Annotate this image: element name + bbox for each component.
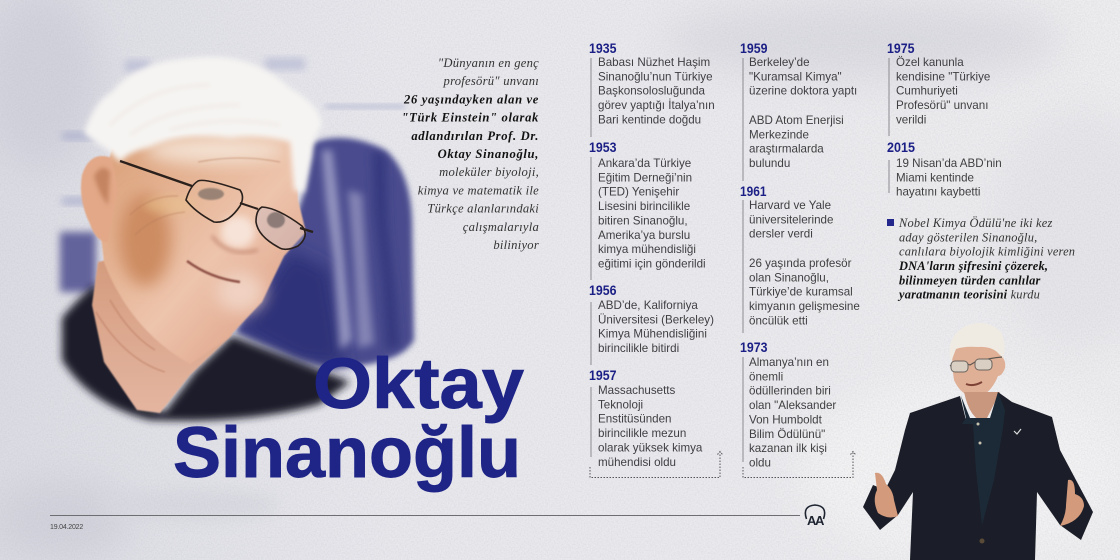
title <box>173 345 525 493</box>
entry 1973: Almanya’nın en <box>749 356 829 369</box>
timeline column 2 <box>740 41 860 469</box>
Nobel callout: yaratmanın teorisini <box>897 288 1008 302</box>
entry 1961: öncülük etti <box>749 314 808 327</box>
entry 1953: Amerika’ya burslu <box>598 229 690 242</box>
entry 1961: olan Sinanoğlu, <box>749 271 829 284</box>
entry 1959: üzerine doktora yaptı <box>749 85 857 98</box>
entry 1957 <box>589 368 703 469</box>
entry 1961: üniversitelerinde <box>749 213 833 226</box>
entry 1961: dersler verdi <box>749 228 813 241</box>
neck <box>92 250 232 413</box>
logo: AA: AA <box>807 513 825 528</box>
entry 1953: (TED) Yenişehir <box>598 186 679 199</box>
jacket <box>863 392 1093 560</box>
entry 1973: 1973 <box>740 340 768 355</box>
entry 1975: verildi <box>896 113 926 126</box>
intro text: biliniyor <box>493 238 539 252</box>
entry 1961: 26 yaşında profesör <box>749 257 852 270</box>
ear <box>81 156 118 242</box>
nose <box>212 236 258 252</box>
entry 1935: görev yaptığı İtalya’nın <box>598 99 715 112</box>
footer line <box>50 515 800 516</box>
entry 1959 <box>740 41 857 181</box>
entry 1935: 1935 <box>589 41 617 56</box>
intro text: Türkçe alanlarındaki <box>427 202 539 216</box>
Nobel callout: canlılara biyolojik kimliğini veren <box>899 245 1075 259</box>
entry 1961 <box>740 184 860 333</box>
entry 1959: araştırmalarda <box>749 143 824 156</box>
entry 1953: kimya mühendisliği <box>598 243 696 256</box>
title: Oktay <box>313 345 525 424</box>
entry 1975: kendisine "Türkiye <box>896 70 990 83</box>
intro text: moleküler biyoloji, <box>439 165 539 179</box>
entry 1973: olan "Aleksander <box>749 399 836 412</box>
entry 1935: Bari kentinde doğdu <box>598 113 701 126</box>
entry 1956: 1956 <box>589 283 617 298</box>
entry 1975: 1975 <box>887 41 915 56</box>
glasses <box>120 161 313 249</box>
date: 19.04.2022 <box>50 524 83 531</box>
entry 1961: Türkiye’de kuramsal <box>749 286 853 299</box>
entry 1953: Eğitim Derneği’nin <box>598 171 692 184</box>
entry 1956: Kimya Mühendisliğini <box>598 328 707 341</box>
entry 1957: mühendisi oldu <box>598 456 676 469</box>
entry 1959: ABD Atom Enerjisi <box>749 114 844 127</box>
timeline column 3 <box>887 41 1002 199</box>
entry 1956 <box>589 283 714 365</box>
intro text: "Dünyanın en genç <box>438 56 539 70</box>
entry 1956: ABD’de, Kaliforniya <box>598 299 698 312</box>
intro text: Oktay Sinanoğlu, <box>438 147 539 161</box>
intro text: çalışmalarıyla <box>463 220 539 234</box>
entry 1953: Lisesini birincilikle <box>598 200 690 213</box>
hair <box>84 57 322 192</box>
entry 1957: olarak yüksek kimya <box>598 441 703 454</box>
entry 1956: birincilikle bitirdi <box>598 342 679 355</box>
entry 1961: 1961 <box>740 184 767 199</box>
mouth <box>187 261 240 282</box>
entry 2015: Miami kentinde <box>896 171 974 184</box>
entry 1953: 1953 <box>589 140 617 155</box>
entry 2015: 2015 <box>887 140 915 155</box>
Nobel callout <box>887 215 1075 302</box>
entry 1959: bulundu <box>749 157 790 170</box>
dotted arrow column 1 <box>590 452 722 478</box>
photo: Sinanoğlu standing, gesturing <box>863 323 1093 560</box>
entry 1973: ödüllerinden biri <box>749 385 831 398</box>
entry 1959: "Kuramsal Kimya" <box>749 70 842 83</box>
entry 1973 <box>740 340 836 469</box>
entry 1957: Teknoloji <box>598 398 643 411</box>
Nobel callout: bilinmeyen türden canlılar <box>899 273 1041 287</box>
entry 1961: Harvard ve Yale <box>749 199 831 212</box>
entry 1975: Cumhuriyeti <box>896 85 958 98</box>
head <box>950 323 1005 422</box>
portrait: Oktay Sinanoğlu close-up <box>60 57 414 421</box>
hands <box>875 473 1084 526</box>
entry 1961: kimyanın gelişmesine <box>749 300 860 313</box>
intro text: adlandırılan Prof. Dr. <box>411 129 539 143</box>
shirt <box>62 284 350 421</box>
entry 2015: hayatını kaybetti <box>896 186 980 199</box>
entry 1957: 1957 <box>589 368 616 383</box>
eyes <box>198 188 285 228</box>
entry 1959: Berkeley’de <box>749 56 810 69</box>
entry 1956: Üniversitesi (Berkeley) <box>598 313 714 326</box>
entry 1935: Başkonsolosluğunda <box>598 85 706 98</box>
wrinkles <box>130 158 280 235</box>
entry 1975: Profesörü" unvanı <box>896 99 988 112</box>
polo shirt <box>961 392 1005 525</box>
entry 1935: Sinanoğlu’nun Türkiye <box>598 70 713 83</box>
entry 1953 <box>589 140 706 280</box>
jacket button and pin <box>976 422 1021 544</box>
intro text: 26 yaşındayken alan ve <box>403 92 539 106</box>
Nobel callout: kurdu <box>1007 288 1040 302</box>
entry 1973: Bilim Ödülünü" <box>749 428 825 441</box>
entry 1959: Merkezinde <box>749 128 809 141</box>
title: Sinanoğlu <box>173 414 521 493</box>
Nobel callout: DNA'ların şifresini çözerek, <box>898 259 1048 273</box>
face <box>98 131 306 364</box>
entry 1973: oldu <box>749 456 771 469</box>
entry 1975: Özel kanunla <box>896 56 964 69</box>
entry 1973: önemli <box>749 370 783 383</box>
bullet square <box>887 219 894 226</box>
entry 1975 <box>887 41 990 136</box>
entry 1957: birincilikle mezun <box>598 427 686 440</box>
entry 2015: 19 Nisan’da ABD’nin <box>896 157 1002 170</box>
entry 1953: eğitimi için gönderildi <box>598 257 706 270</box>
entry 1957: Enstitüsünden <box>598 413 671 426</box>
Nobel callout: aday gösterilen Sinanoğlu, <box>899 230 1037 244</box>
intro text: "Türk Einstein" olarak <box>402 111 539 125</box>
intro text: kimya ve matematik ile <box>418 183 539 197</box>
dotted arrow column 2 <box>743 452 856 478</box>
entry 1957: Massachusetts <box>598 384 676 397</box>
Nobel callout: Nobel Kimya Ödülü'ne iki kez <box>898 215 1052 230</box>
logo: AA <box>805 505 825 528</box>
entry 1973: kazanan ilk kişi <box>749 442 827 455</box>
entry 1935 <box>589 41 715 137</box>
entry 1953: Ankara’da Türkiye <box>598 157 691 170</box>
entry 1959: 1959 <box>740 41 768 56</box>
entry 1935: Babası Nüzhet Haşim <box>598 56 710 69</box>
entry 2015 <box>887 140 1002 199</box>
timeline column 1 <box>589 41 715 469</box>
entry 1973: Von Humboldt <box>749 413 823 426</box>
blurred blue background behind portrait <box>60 58 414 368</box>
intro text: profesörü" unvanı <box>443 74 539 88</box>
entry 1953: bitiren Sinanoğlu, <box>598 214 688 227</box>
